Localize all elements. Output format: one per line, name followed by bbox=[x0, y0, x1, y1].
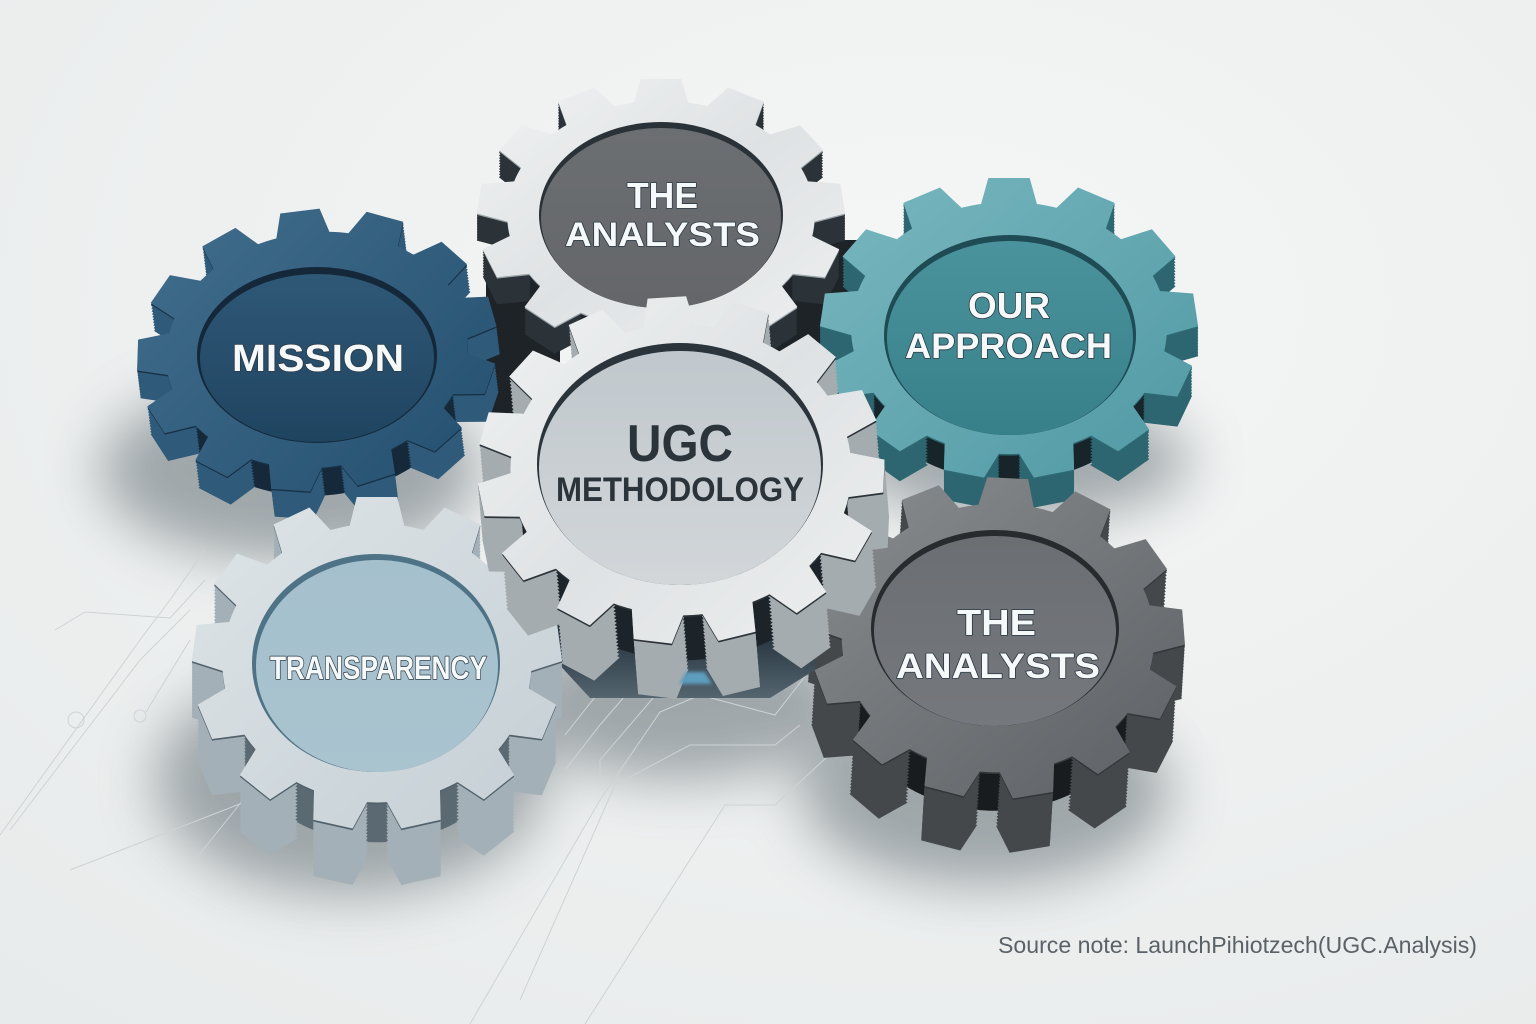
gear: The Analysts (bottom right) bbox=[808, 477, 1185, 853]
inner disc: Our Approach bbox=[887, 241, 1133, 435]
label: UGC Methodology: UGC bbox=[627, 415, 733, 473]
label: UGC Methodology bbox=[556, 415, 804, 509]
recess: UGC Methodology bbox=[537, 343, 823, 585]
recess: The Analysts bbox=[539, 122, 783, 308]
inner disc: The Analysts bottom bbox=[874, 536, 1116, 726]
label: The Analysts bottom: ANALYSTS bbox=[896, 647, 1100, 686]
gear: Transparency bbox=[184, 489, 570, 887]
circuit board traces bbox=[0, 550, 840, 1024]
label: The Analysts bottom: THE bbox=[957, 602, 1036, 643]
source note: Source note: LaunchPihiotzech(UGC.Analysis) bbox=[998, 932, 1477, 958]
label: The Analysts top: THE bbox=[627, 175, 698, 216]
soft cast shadows bbox=[100, 380, 1190, 895]
inner disc: Mission bbox=[200, 274, 434, 442]
label: Our Approach bbox=[905, 285, 1112, 366]
label: Mission: MISSION bbox=[232, 338, 404, 380]
dark gaps behind the central gear bbox=[486, 240, 895, 575]
recess: Mission bbox=[197, 267, 437, 443]
blue glow accents under the gear bbox=[679, 672, 712, 684]
underside of central gear bbox=[555, 560, 815, 698]
gear: Our Approach bbox=[812, 170, 1206, 509]
recess: The Analysts bottom bbox=[871, 530, 1119, 726]
label: UGC Methodology: METHODOLOGY bbox=[556, 471, 804, 509]
label: Transparency: TRANSPARENCY bbox=[270, 650, 487, 686]
inner disc: The Analysts bbox=[541, 128, 781, 308]
label: Our Approach: APPROACH bbox=[905, 327, 1112, 366]
label: The Analysts top: ANALYSTS bbox=[565, 216, 760, 254]
recess: Transparency bbox=[252, 554, 500, 772]
label: The Analysts top bbox=[565, 175, 760, 254]
gear: UGC Methodology (center) bbox=[478, 296, 889, 698]
inner disc: UGC Methodology bbox=[539, 351, 821, 585]
inner disc: Transparency bbox=[256, 560, 498, 772]
gear: The Analysts (top) bbox=[476, 79, 846, 354]
gear: Mission bbox=[137, 208, 500, 518]
recess: Our Approach bbox=[884, 235, 1136, 435]
label: The Analysts bottom bbox=[896, 602, 1100, 686]
label: Our Approach: OUR bbox=[968, 285, 1050, 326]
